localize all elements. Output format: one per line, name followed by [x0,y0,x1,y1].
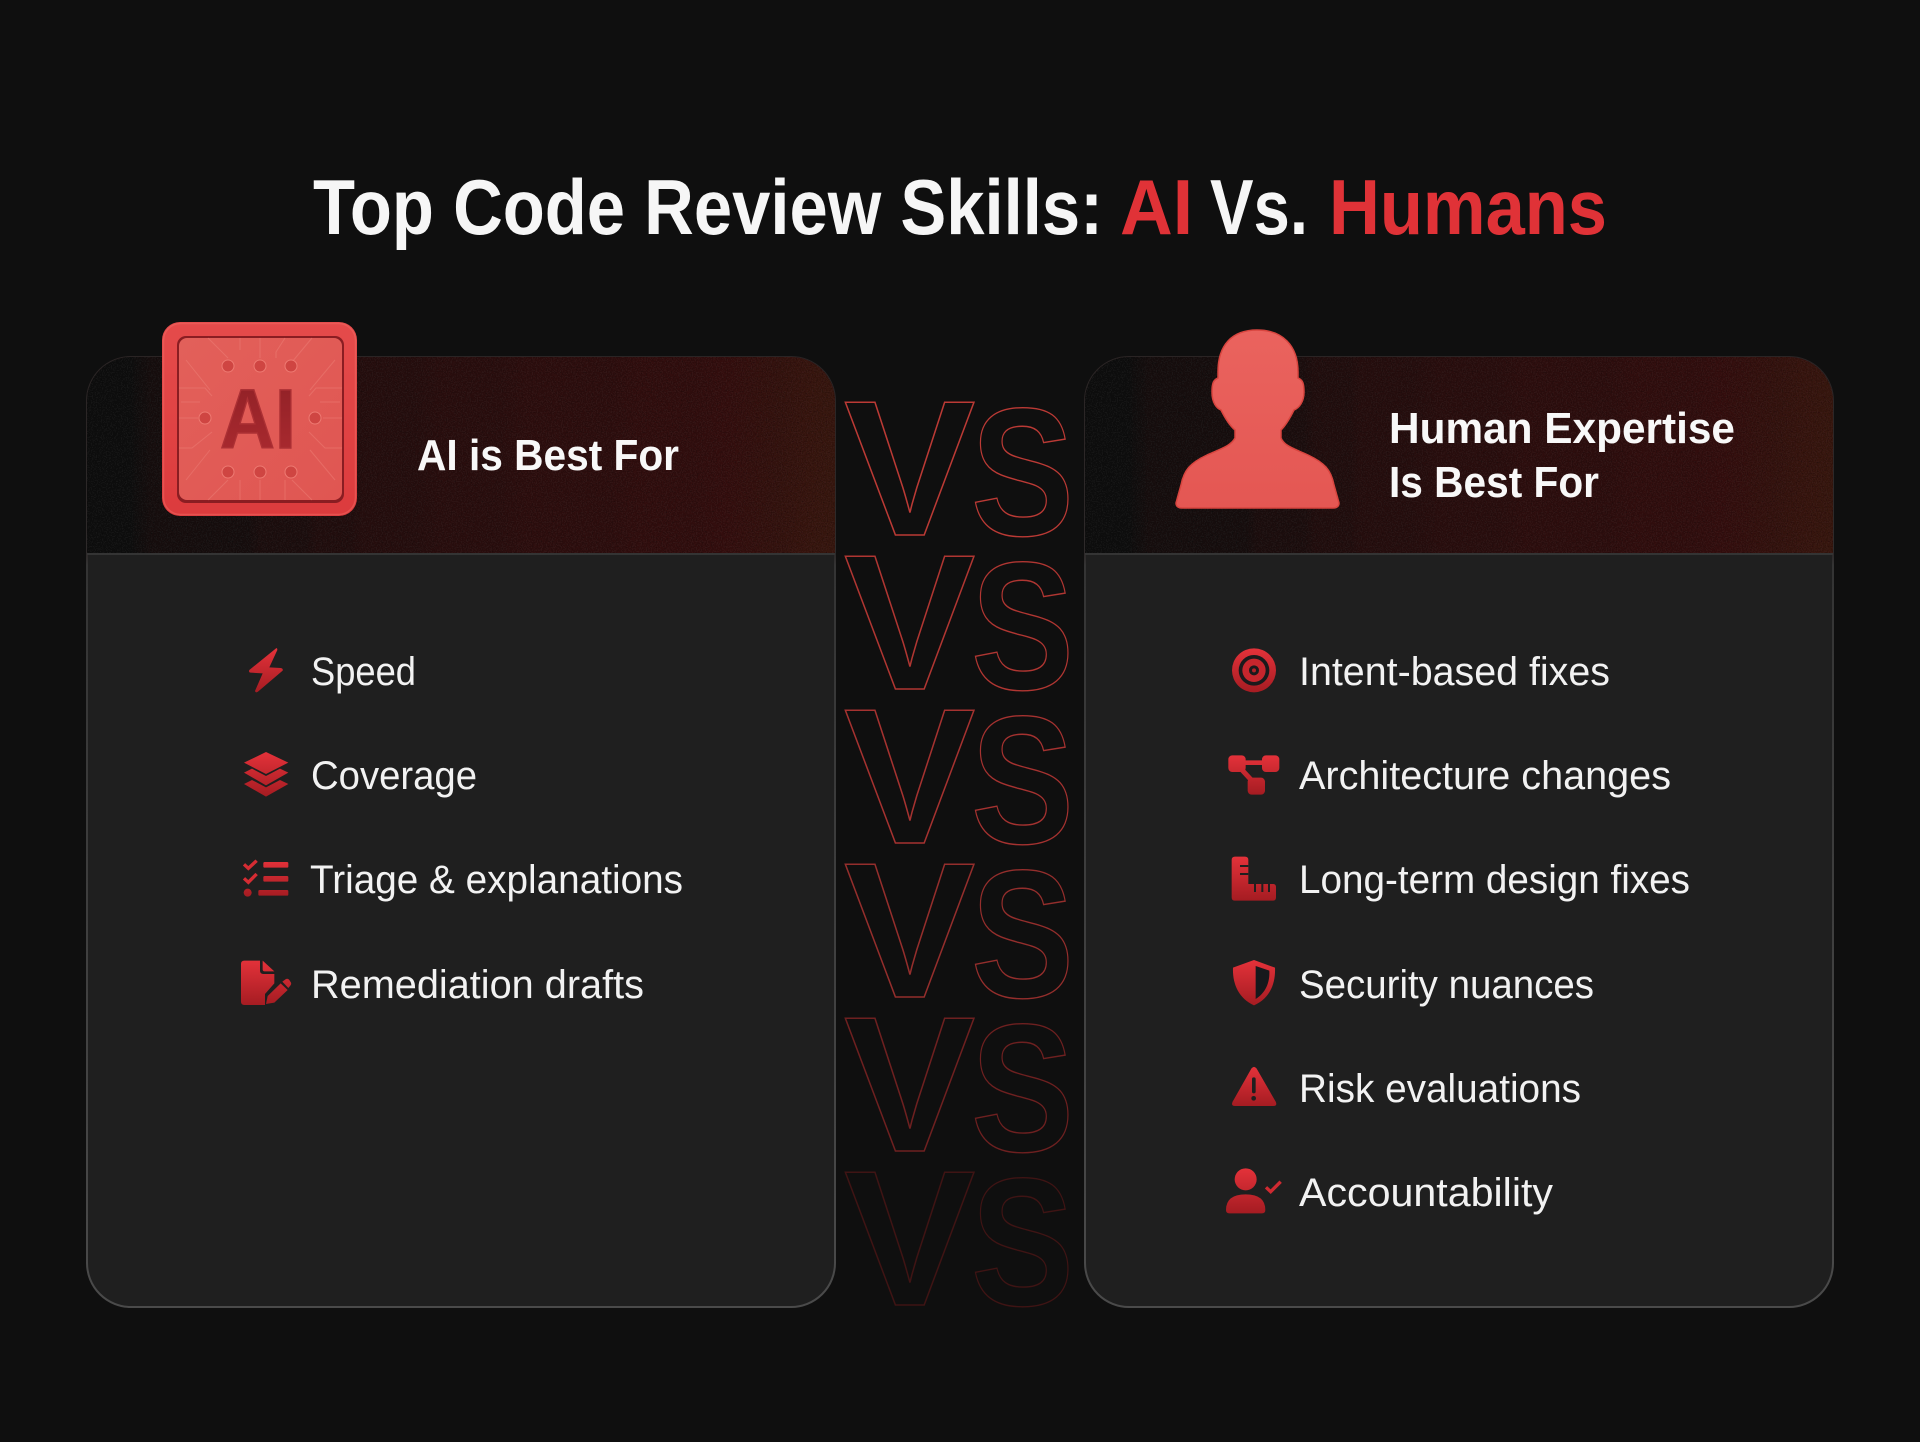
panel header: Human [1085,357,1833,553]
VS row 6: S [971,1140,1074,1344]
VS row 4: S [971,832,1074,1036]
list: human strengths [1226,648,1690,1215]
VS row 1 [844,362,1074,577]
title [313,163,1607,251]
VS row 2: S [971,524,1074,728]
VS row 6: V [844,1132,975,1347]
item: Coverage: Coverage [311,754,477,798]
list: AI strengths [241,648,683,1007]
icon: human silhouette [1176,330,1339,508]
title: Vs. [1210,163,1308,251]
VS row 5: V [844,978,975,1193]
heading: AI is Best For: AI is Best For [417,431,679,480]
panel: AI is best for [87,322,835,1307]
item: Security nuances: Security nuances [1299,963,1594,1007]
heading: Human Expertise Is Best For: Human Expertise [1389,404,1735,453]
VS row 3: V [844,670,975,885]
panel header: AI [87,357,835,553]
VS row 2 [844,516,1074,731]
VS row 4 [844,824,1074,1039]
heading: Human Expertise Is Best For: Is Best For [1389,458,1599,507]
VS row 3 [844,670,1074,885]
item: Architecture changes: Architecture changes [1299,754,1671,798]
VS row 2: V [844,516,975,731]
item: Speed: Speed [311,650,416,694]
VS row 1: V [844,362,975,577]
VS row 5 [844,978,1074,1193]
title: AI [1120,163,1193,251]
title: Top Code Review Skills: [313,163,1103,251]
title: Humans [1329,163,1607,251]
icon: AI chip [162,322,357,516]
item: Long-term design fixes: Long-term design fixes [1299,858,1690,902]
VS row 4: V [844,824,975,1039]
heading: Human Expertise Is Best For [1389,404,1735,507]
item: Coverage [244,752,477,798]
item: Intent-based fixes: Intent-based fixes [1299,650,1610,694]
item: Risk evaluations: Risk evaluations [1299,1067,1581,1111]
VS row 5: S [971,986,1074,1190]
VS row 1: S [971,370,1074,574]
icon: AI chip: AI [220,372,296,466]
item: Accountability: Accountability [1299,1171,1553,1215]
VS column [844,362,1074,1347]
item: Speed [249,648,416,694]
item: Remediation drafts: Remediation drafts [311,963,644,1007]
VS row 6 [844,1132,1074,1347]
panel: Human expertise is best for [1085,330,1833,1307]
item: Triage & explanations: Triage & explanations [310,858,683,902]
VS row 3: S [971,678,1074,882]
